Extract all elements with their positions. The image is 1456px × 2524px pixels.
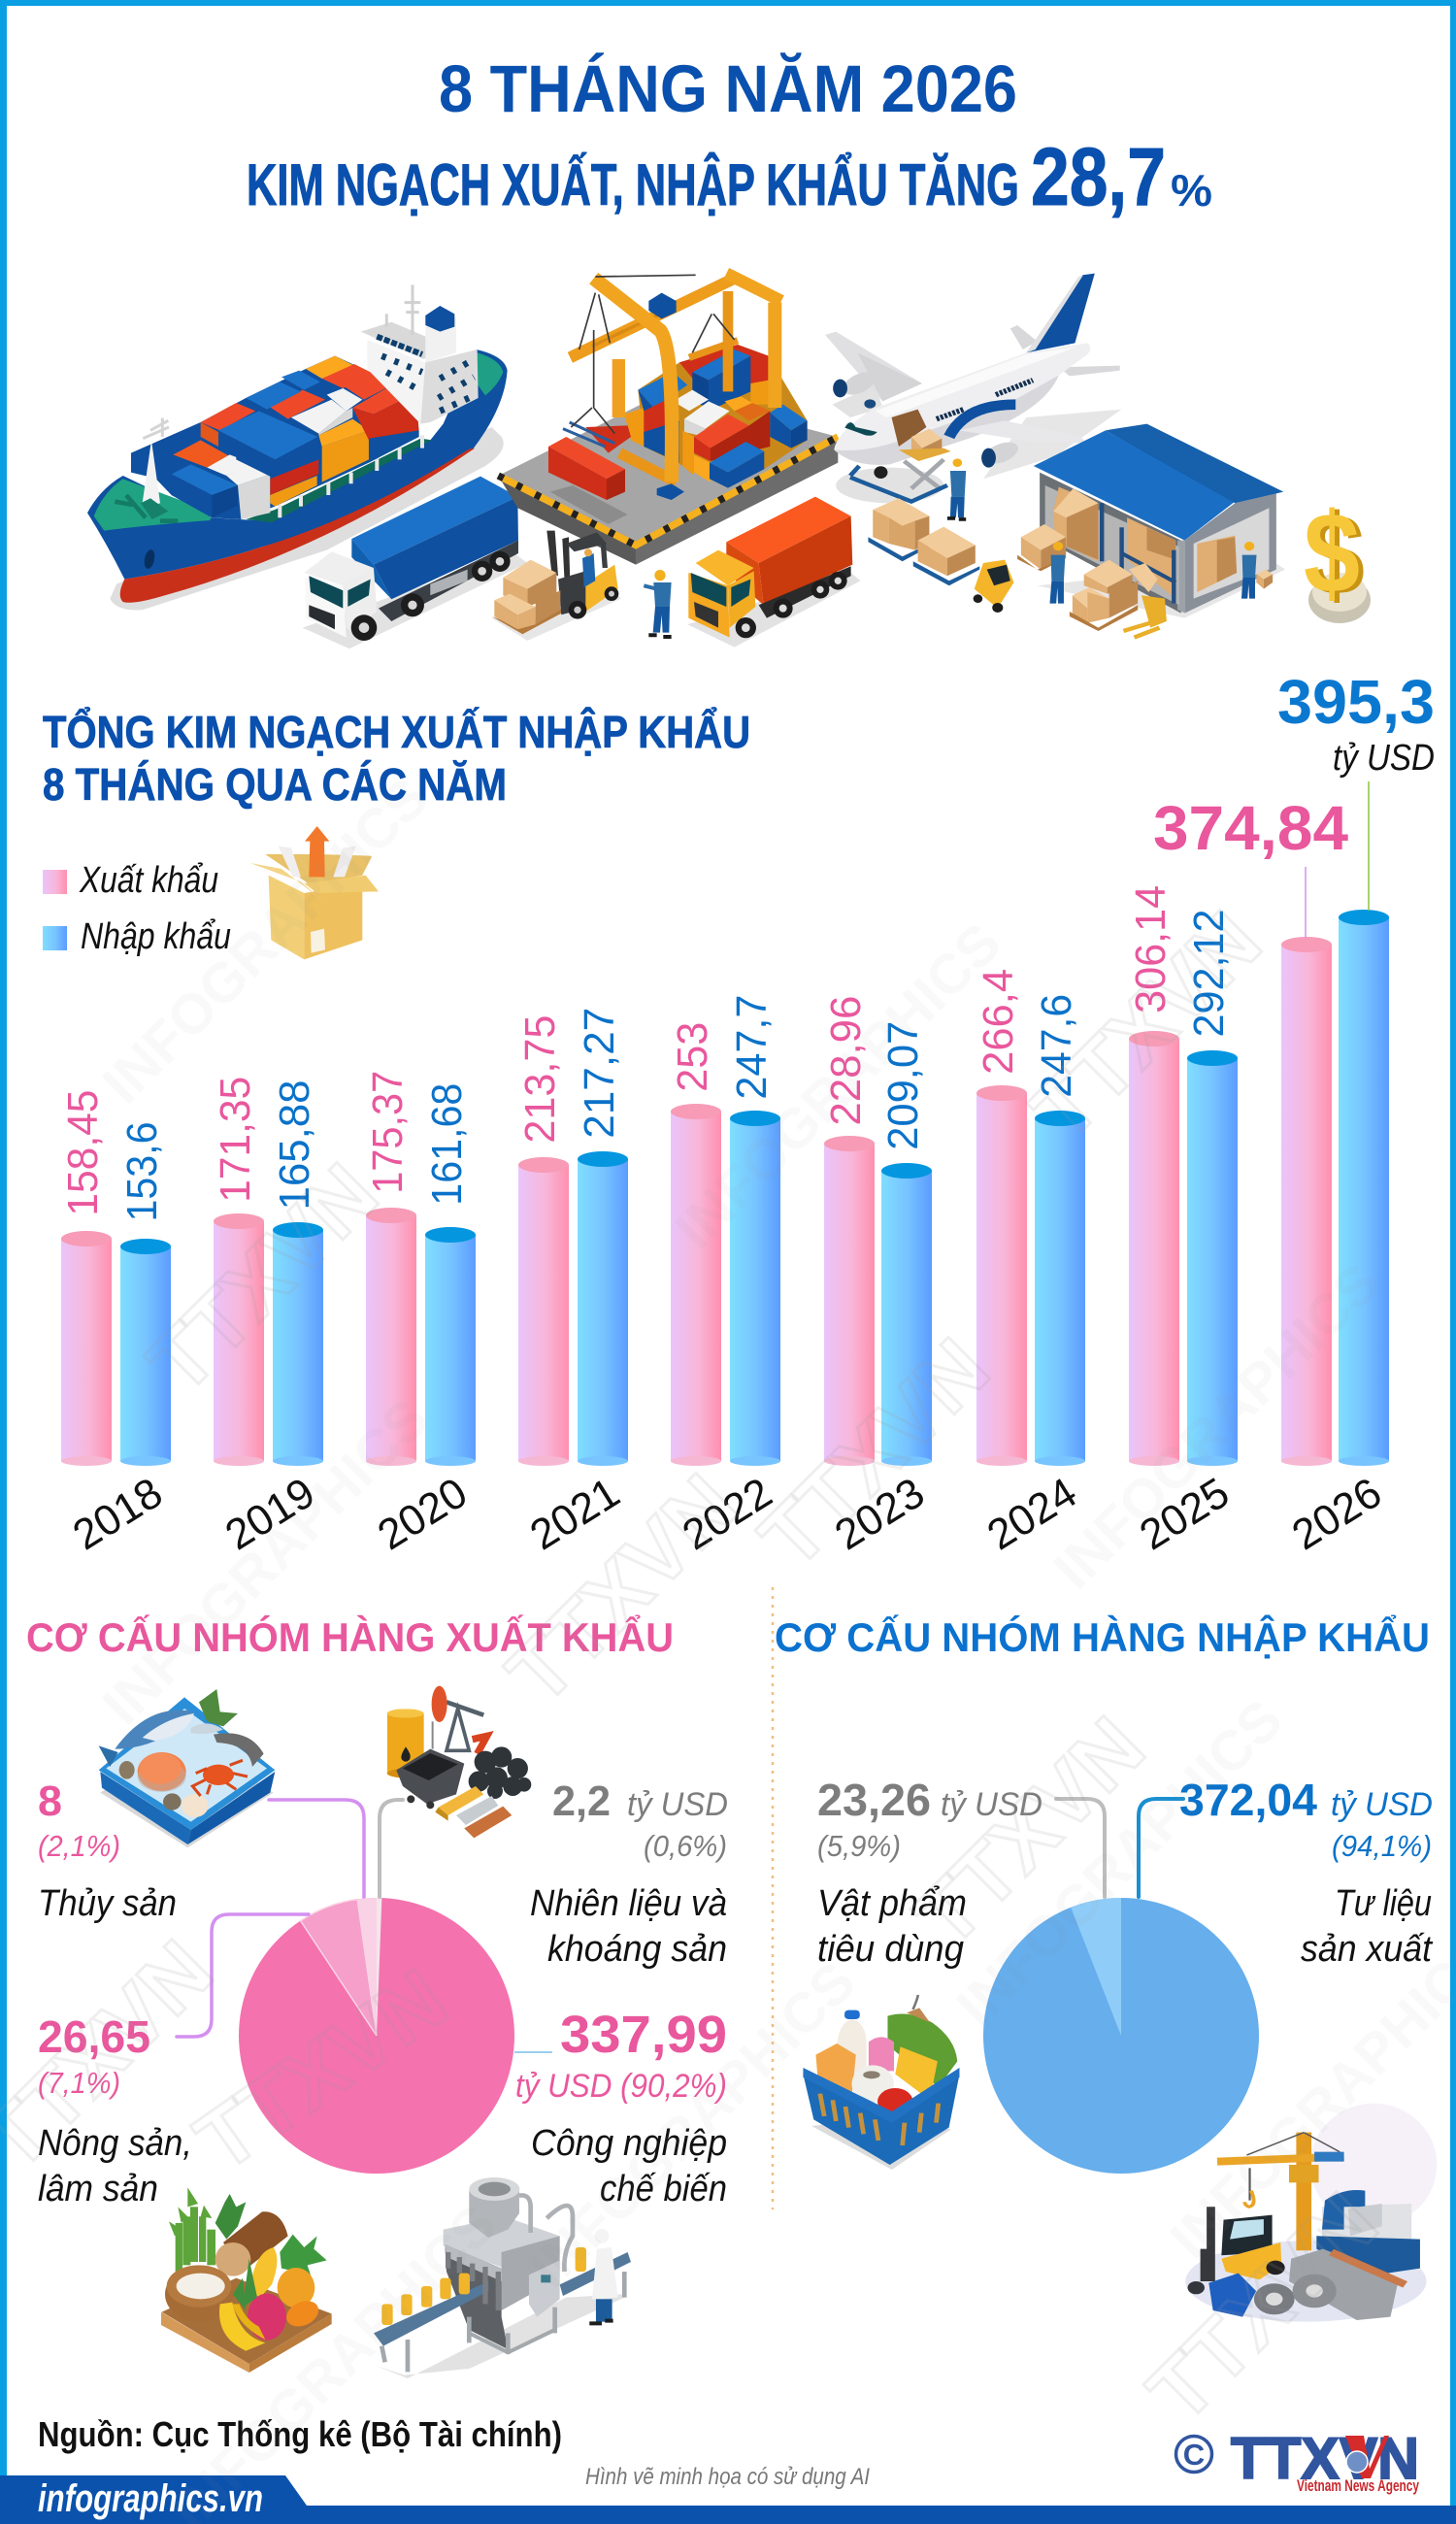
watermark: TTXVN bbox=[179, 1950, 463, 2190]
bar chart: export vs import 2018-2026 bbox=[59, 885, 1390, 1559]
value labels: 171,35 bbox=[212, 1077, 259, 1203]
year axis labels: 2020 bbox=[370, 1469, 476, 1559]
illustration: orange truck bbox=[687, 497, 861, 648]
connector: fuel bbox=[380, 1800, 403, 1897]
year axis labels: 2019 bbox=[217, 1469, 323, 1559]
pie chart: export bbox=[239, 1898, 514, 2174]
icon: shopping basket bbox=[803, 1995, 959, 2170]
connector: fisheries bbox=[269, 1800, 364, 1897]
label: processing industry: tỷ USD (90,2%) bbox=[515, 2068, 727, 2105]
label: fuel and minerals bbox=[530, 1777, 728, 1970]
watermark: INFOGRAPHICS bbox=[1042, 1251, 1392, 1601]
label: agriculture and forestry bbox=[38, 2011, 192, 2209]
year axis labels: 2023 bbox=[827, 1469, 933, 1559]
watermark bbox=[0, 766, 1456, 2524]
illustration: container yard with gantry crane bbox=[498, 274, 838, 565]
year axis labels: 2022 bbox=[675, 1469, 780, 1559]
source line: Nguồn: Cục Thống kê (Bộ Tài chính) bbox=[38, 2414, 562, 2454]
year axis labels: 2018 bbox=[65, 1469, 171, 1559]
label: production materials: 372,04 bbox=[1179, 1775, 1317, 1825]
icon: agricultural products crate bbox=[161, 2187, 332, 2373]
watermark: INFOGRAPHICS bbox=[90, 1387, 441, 1737]
callout: 2026 export: 374,84 bbox=[1153, 793, 1348, 863]
bars 2020 bbox=[366, 1208, 476, 1466]
label: consumer goods: 23,26 bbox=[817, 1775, 931, 1825]
label: consumer goods: tiêu dùng bbox=[817, 1929, 964, 1970]
value labels: 253 bbox=[669, 1022, 716, 1092]
value labels: 175,37 bbox=[364, 1071, 412, 1194]
footer band: infographics.vn bbox=[38, 2477, 263, 2520]
label: fisheries: Thủy sản bbox=[38, 1883, 177, 1924]
value labels: 228,96 bbox=[822, 996, 870, 1126]
value labels: 158,45 bbox=[59, 1090, 107, 1216]
watermark: INFOGRAPHICS bbox=[944, 1688, 1295, 2038]
legend: export bbox=[43, 860, 218, 901]
watermark: INFOGRAPHICS bbox=[663, 912, 1013, 1261]
chart heading bbox=[43, 707, 750, 810]
watermark: TTXVN bbox=[488, 1455, 754, 1721]
label: production materials: (94,1%) bbox=[1332, 1829, 1432, 1863]
legend: import bbox=[43, 916, 231, 957]
illustration: cargo plane bbox=[825, 274, 1122, 519]
icon: gold dollar statue: $ bbox=[1308, 491, 1365, 619]
label: consumer goods: Vật phẩm bbox=[817, 1883, 967, 1924]
bars 2026 bbox=[1281, 910, 1389, 1466]
illustration: forklift with boxes and worker bbox=[492, 531, 672, 641]
icon: open box with arrow bbox=[250, 826, 379, 959]
bars 2019 bbox=[214, 1213, 323, 1466]
watermark: TTXVN bbox=[896, 1698, 1162, 1964]
bars 2025 bbox=[1129, 1031, 1238, 1466]
label: processing industry: 337,99 bbox=[560, 2006, 727, 2064]
value labels: 292,12 bbox=[1185, 909, 1233, 1037]
label: fuel and minerals: tỷ USD bbox=[627, 1786, 728, 1823]
label: agriculture and forestry: lâm sản bbox=[38, 2169, 158, 2209]
title: 28,7 bbox=[1031, 131, 1166, 222]
value labels: 213,75 bbox=[516, 1015, 564, 1144]
legend: import: Nhập khẩu bbox=[81, 916, 231, 957]
watermark: TTXVN bbox=[1129, 2174, 1395, 2440]
label: fuel and minerals: 2,2 bbox=[552, 1777, 611, 1825]
year axis labels: 2026 bbox=[1284, 1469, 1390, 1559]
icon: oil, coal and metals bbox=[387, 1686, 531, 1838]
bars 2018 bbox=[61, 1231, 171, 1466]
label: fuel and minerals: (0,6%) bbox=[644, 1829, 727, 1863]
bars 2023 bbox=[824, 1136, 932, 1466]
year axis labels bbox=[65, 1469, 1390, 1559]
logo: copyright mark bbox=[1176, 2437, 1211, 2472]
chart heading: TỔNG KIM NGẠCH XUẤT NHẬP KHẨU bbox=[43, 707, 750, 757]
watermark: INFOGRAPHICS bbox=[517, 1950, 868, 2300]
label: consumer goods: tỷ USD bbox=[941, 1786, 1042, 1823]
watermark: TTXVN bbox=[1012, 892, 1278, 1158]
illustration: boxes on trolleys and small forklift bbox=[868, 498, 1013, 613]
label: fisheries: (2,1%) bbox=[38, 1829, 120, 1863]
footer band bbox=[0, 2475, 1456, 2524]
icon: machinery and construction equipment bbox=[1185, 2104, 1437, 2322]
icon: gold dollar statue: $ bbox=[1304, 489, 1360, 617]
watermark: INFOGRAPHICS bbox=[90, 766, 441, 1115]
value labels bbox=[59, 885, 1233, 1221]
logo: TTXVN: TTXVN bbox=[1231, 2426, 1419, 2491]
watermark: TTXVN bbox=[741, 1319, 1007, 1585]
title: 8 THÁNG NĂM 2026 bbox=[439, 51, 1017, 126]
value labels: 209,07 bbox=[879, 1021, 927, 1150]
icon: seafood tray bbox=[99, 1689, 275, 1847]
bars 2021 bbox=[518, 1151, 628, 1466]
label: consumer goods bbox=[817, 1775, 1042, 1970]
bars 2024 bbox=[976, 1085, 1085, 1466]
chart heading: 8 THÁNG QUA CÁC NĂM bbox=[43, 759, 507, 810]
connector: processing bbox=[514, 2051, 552, 2053]
illustration: white truck with blue container bbox=[303, 477, 527, 648]
value labels: 247,6 bbox=[1033, 994, 1080, 1098]
label: fuel and minerals: khoáng sản bbox=[547, 1929, 727, 1970]
year axis labels: 2025 bbox=[1132, 1469, 1238, 1559]
label: production materials: tỷ USD bbox=[1331, 1786, 1433, 1823]
title bbox=[247, 51, 1212, 222]
label: agriculture and forestry: 26,65 bbox=[38, 2011, 150, 2062]
illustration: warehouse and workers bbox=[1017, 424, 1285, 638]
callout: 2026 import: tỷ USD bbox=[1333, 738, 1435, 779]
label: processing industry: Công nghiệp bbox=[531, 2123, 727, 2164]
value labels: 266,4 bbox=[975, 969, 1022, 1075]
label: consumer goods: (5,9%) bbox=[817, 1829, 901, 1863]
illustration: container ship bbox=[87, 284, 508, 610]
heading: import structure: CƠ CẤU NHÓM HÀNG NHẬP KHẨU bbox=[775, 1613, 1430, 1660]
label: production materials: Tư liệu bbox=[1335, 1883, 1432, 1924]
callout: 2026 import bbox=[1277, 667, 1435, 911]
value labels: 306,14 bbox=[1127, 885, 1175, 1013]
watermark: TTXVN bbox=[129, 1145, 395, 1411]
label: processing industry: chế biến bbox=[600, 2169, 727, 2209]
year axis labels: 2021 bbox=[522, 1469, 628, 1559]
label: fisheries: 8 bbox=[38, 1777, 62, 1825]
label: agriculture and forestry: (7,1%) bbox=[38, 2066, 120, 2100]
AI note: Hình vẽ minh họa có sử dụng AI bbox=[585, 2464, 870, 2490]
bars 2022 bbox=[671, 1104, 780, 1466]
heading: export structure: CƠ CẤU NHÓM HÀNG XUẤT KHẨU bbox=[26, 1613, 674, 1660]
title: % bbox=[1171, 165, 1212, 216]
label: processing industry bbox=[515, 2006, 727, 2209]
connector: consumer goods bbox=[1056, 1799, 1105, 1897]
value labels: 217,27 bbox=[576, 1008, 623, 1139]
value labels: 165,88 bbox=[271, 1079, 318, 1210]
connector: agriculture bbox=[177, 1914, 309, 2037]
label: agriculture and forestry: Nông sản, bbox=[38, 2123, 192, 2164]
label: production materials: sản xuất bbox=[1301, 1929, 1433, 1970]
label: fisheries bbox=[38, 1777, 177, 1924]
legend: export: Xuất khẩu bbox=[79, 860, 218, 901]
label: production materials bbox=[1179, 1775, 1433, 1970]
year axis labels: 2024 bbox=[979, 1469, 1085, 1559]
title: KIM NGẠCH XUẤT, NHẬP KHẨU TĂNG bbox=[247, 152, 1019, 217]
logo: copyright mark: C bbox=[1183, 2438, 1205, 2472]
value labels: 153,6 bbox=[118, 1122, 166, 1221]
value labels: 247,7 bbox=[728, 995, 776, 1100]
connector: production materials bbox=[1139, 1799, 1183, 1897]
value labels: 161,68 bbox=[423, 1083, 471, 1206]
icon: bottling machine bbox=[374, 2177, 631, 2378]
pie chart: import bbox=[983, 1898, 1259, 2174]
label: fuel and minerals: Nhiên liệu và bbox=[530, 1883, 727, 1924]
callout: 2026 import: 395,3 bbox=[1277, 667, 1435, 737]
